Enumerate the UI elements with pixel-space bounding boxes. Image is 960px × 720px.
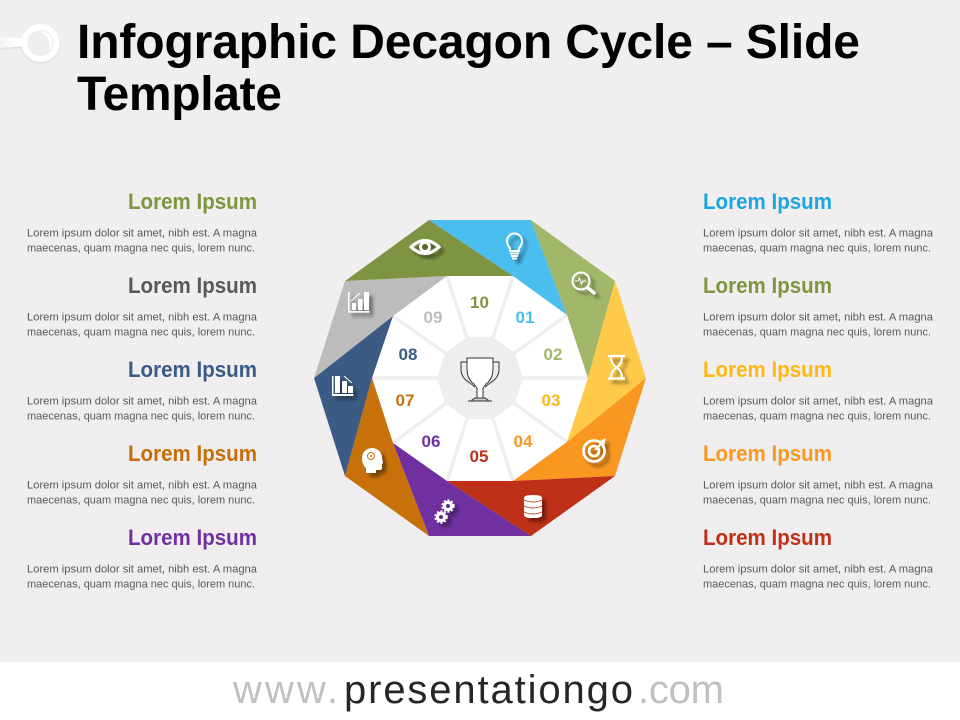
spokes: [372, 276, 588, 481]
left item: olive: Lorem Ipsum: [128, 189, 257, 214]
wedge 08 navy: [314, 316, 393, 476]
footer band: [0, 662, 960, 720]
right item: blue: [703, 189, 934, 254]
footer url: [232, 668, 724, 712]
left item: grey: maecenas, quam magna nec quis, lorem nunc.: [27, 326, 255, 338]
footer url: presentationgo: [344, 668, 633, 712]
numbers: 07: [396, 391, 414, 410]
icon: eye: [411, 240, 439, 254]
wedge 07 dark orange: [345, 378, 429, 536]
right item: olive: Lorem Ipsum: [703, 273, 832, 298]
left item: purple: maecenas, quam magna nec quis, lorem nunc.: [27, 578, 255, 590]
right item: red: [703, 525, 934, 590]
left item: grey: Lorem Ipsum: [128, 273, 257, 298]
numbers: 10: [470, 293, 489, 312]
title: [77, 16, 860, 121]
left item: olive: [27, 189, 258, 254]
wedge 09 grey: [314, 276, 447, 378]
wedge 05 red: [447, 476, 615, 536]
left item: grey: Lorem ipsum dolor sit amet, nibh est. A magna: [27, 312, 258, 324]
wedge 10 olive: [345, 220, 513, 281]
icon: target: [584, 439, 605, 462]
right item: orange: Lorem ipsum dolor sit amet, nibh est. A magna: [703, 480, 934, 492]
right item: yellow: [703, 357, 934, 422]
center decagon: [437, 337, 523, 419]
numbers: 09: [424, 308, 442, 327]
right item: blue: maecenas, quam magna nec quis, lorem nunc.: [703, 242, 931, 254]
icon: magnifier with pulse: [572, 272, 594, 293]
title: Infographic Decagon Cycle – Slide: [77, 16, 860, 69]
icon: descending bar chart: [332, 376, 354, 396]
left item: navy: maecenas, quam magna nec quis, lorem nunc.: [27, 410, 255, 422]
right item: blue: Lorem Ipsum: [703, 189, 832, 214]
numbers: 08: [399, 345, 417, 364]
left item: dark orange: maecenas, quam magna nec quis, lorem nunc.: [27, 494, 255, 506]
left item: grey: [27, 273, 258, 338]
left item: olive: Lorem ipsum dolor sit amet, nibh est. A magna: [27, 228, 258, 240]
left item: navy: Lorem ipsum dolor sit amet, nibh est. A magna: [27, 396, 258, 408]
wedge 04 orange: [513, 378, 646, 481]
right item: olive: Lorem ipsum dolor sit amet, nibh est. A magna: [703, 312, 934, 324]
icon: head with idea: [362, 448, 383, 473]
right item: olive: maecenas, quam magna nec quis, lorem nunc.: [703, 326, 931, 338]
icon: hourglass: [608, 356, 625, 378]
right item: yellow: Lorem ipsum dolor sit amet, nibh est. A magna: [703, 396, 934, 408]
right item: orange: maecenas, quam magna nec quis, lorem nunc.: [703, 494, 931, 506]
ornament: white ring and taper: [0, 27, 56, 59]
icon: gears: [435, 500, 454, 523]
numbers: [396, 293, 562, 466]
right item: blue: Lorem ipsum dolor sit amet, nibh est. A magna: [703, 228, 934, 240]
inner white decagon: [372, 276, 588, 481]
right item: olive: [703, 273, 934, 338]
numbers: 02: [544, 345, 562, 364]
decagon cycle diagram: [314, 220, 646, 536]
title: Template: [77, 68, 282, 121]
right item: red: Lorem ipsum dolor sit amet, nibh est. A magna: [703, 564, 934, 576]
icon: light bulb: [507, 234, 522, 258]
left item: purple: Lorem Ipsum: [128, 525, 257, 550]
right item: orange: Lorem Ipsum: [703, 441, 832, 466]
right item: yellow: maecenas, quam magna nec quis, lorem nunc.: [703, 410, 931, 422]
numbers: 04: [514, 432, 533, 451]
right item: orange: [703, 441, 934, 506]
right item: red: Lorem Ipsum: [703, 525, 832, 550]
wedge 02 green: [531, 220, 615, 378]
left item: dark orange: [27, 441, 258, 506]
numbers: 03: [542, 391, 560, 410]
wedge 03 yellow: [567, 281, 646, 442]
wedge 06 purple: [393, 443, 531, 536]
left item: navy: [27, 357, 258, 422]
icon: database: [524, 495, 542, 518]
footer url: www.: [232, 668, 338, 712]
icon: ascending bar chart: [348, 292, 370, 313]
left item: dark orange: Lorem Ipsum: [128, 441, 257, 466]
right item: yellow: Lorem Ipsum: [703, 357, 832, 382]
right item: red: maecenas, quam magna nec quis, lorem nunc.: [703, 578, 931, 590]
numbers: 05: [470, 447, 488, 466]
left item: olive: maecenas, quam magna nec quis, lorem nunc.: [27, 242, 255, 254]
left item: navy: Lorem Ipsum: [128, 357, 257, 382]
right text column: [703, 189, 934, 590]
numbers: 06: [422, 432, 440, 451]
left text column: [27, 189, 258, 590]
wedge 01 blue: [429, 220, 567, 315]
numbers: 01: [516, 308, 534, 327]
left item: dark orange: Lorem ipsum dolor sit amet, nibh est. A magna: [27, 480, 258, 492]
left item: purple: Lorem ipsum dolor sit amet, nibh est. A magna: [27, 564, 258, 576]
footer url: .com: [638, 668, 724, 712]
left item: purple: [27, 525, 258, 590]
icon: trophy: [461, 358, 499, 401]
